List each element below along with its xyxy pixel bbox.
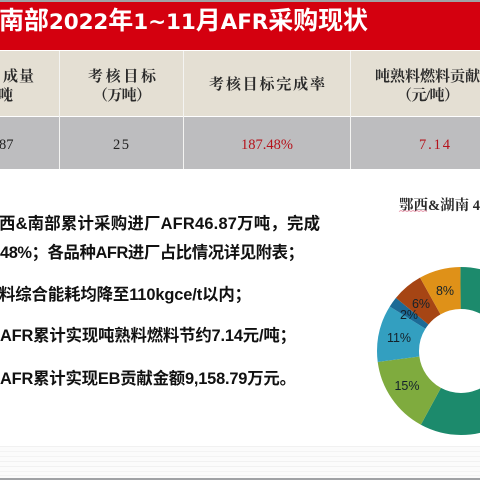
column: target completion rate: 考核目标完成率 xyxy=(209,75,326,93)
column: fuel contribution per ton clinker: （元/吨） xyxy=(397,87,459,104)
footer stripes xyxy=(0,446,480,480)
column: target completion rate: 187.48% xyxy=(241,137,293,153)
title banner xyxy=(0,2,480,50)
column: assessment target: 考核目标 xyxy=(88,67,158,85)
title banner: 南部2022年1~11月AFR采购现状 xyxy=(0,6,368,35)
summary text: AFR累计实现EB贡献金额9,158.79万元。 xyxy=(0,369,296,388)
summary text: AFR累计实现吨熟料燃料节约7.14元/吨； xyxy=(0,326,296,345)
column: fuel contribution per ton clinker: 吨熟料燃料贡献 xyxy=(375,67,480,85)
data table xyxy=(0,51,480,169)
column: fuel contribution per ton clinker xyxy=(375,67,480,153)
donut labels: 11% xyxy=(387,331,411,345)
summary text: 48%；各品种AFR进厂占比情况详见附表； xyxy=(0,243,304,262)
summary text: 西&南部累计采购进厂AFR46.87万吨，完成 xyxy=(0,214,320,233)
donut labels: 8% xyxy=(436,284,454,298)
column: completed volume: 成量 xyxy=(3,67,34,85)
column: completed volume xyxy=(0,67,34,153)
summary text xyxy=(0,214,320,388)
column: assessment target: （万吨） xyxy=(93,87,151,104)
summary text: 料综合能耗均降至110kgce/t以内； xyxy=(0,285,251,304)
column: assessment target: 25 xyxy=(113,137,129,153)
column: fuel contribution per ton clinker: 7.14 xyxy=(419,137,451,153)
donut labels: 6% xyxy=(412,297,430,311)
chart title: 鄂西&湖南 4 xyxy=(399,196,480,214)
column: target completion rate xyxy=(209,75,326,153)
donut labels: 2% xyxy=(400,308,418,322)
column: assessment target xyxy=(88,67,158,153)
donut chart xyxy=(387,284,480,414)
donut labels: 15% xyxy=(394,379,420,393)
donut labels xyxy=(387,284,454,393)
